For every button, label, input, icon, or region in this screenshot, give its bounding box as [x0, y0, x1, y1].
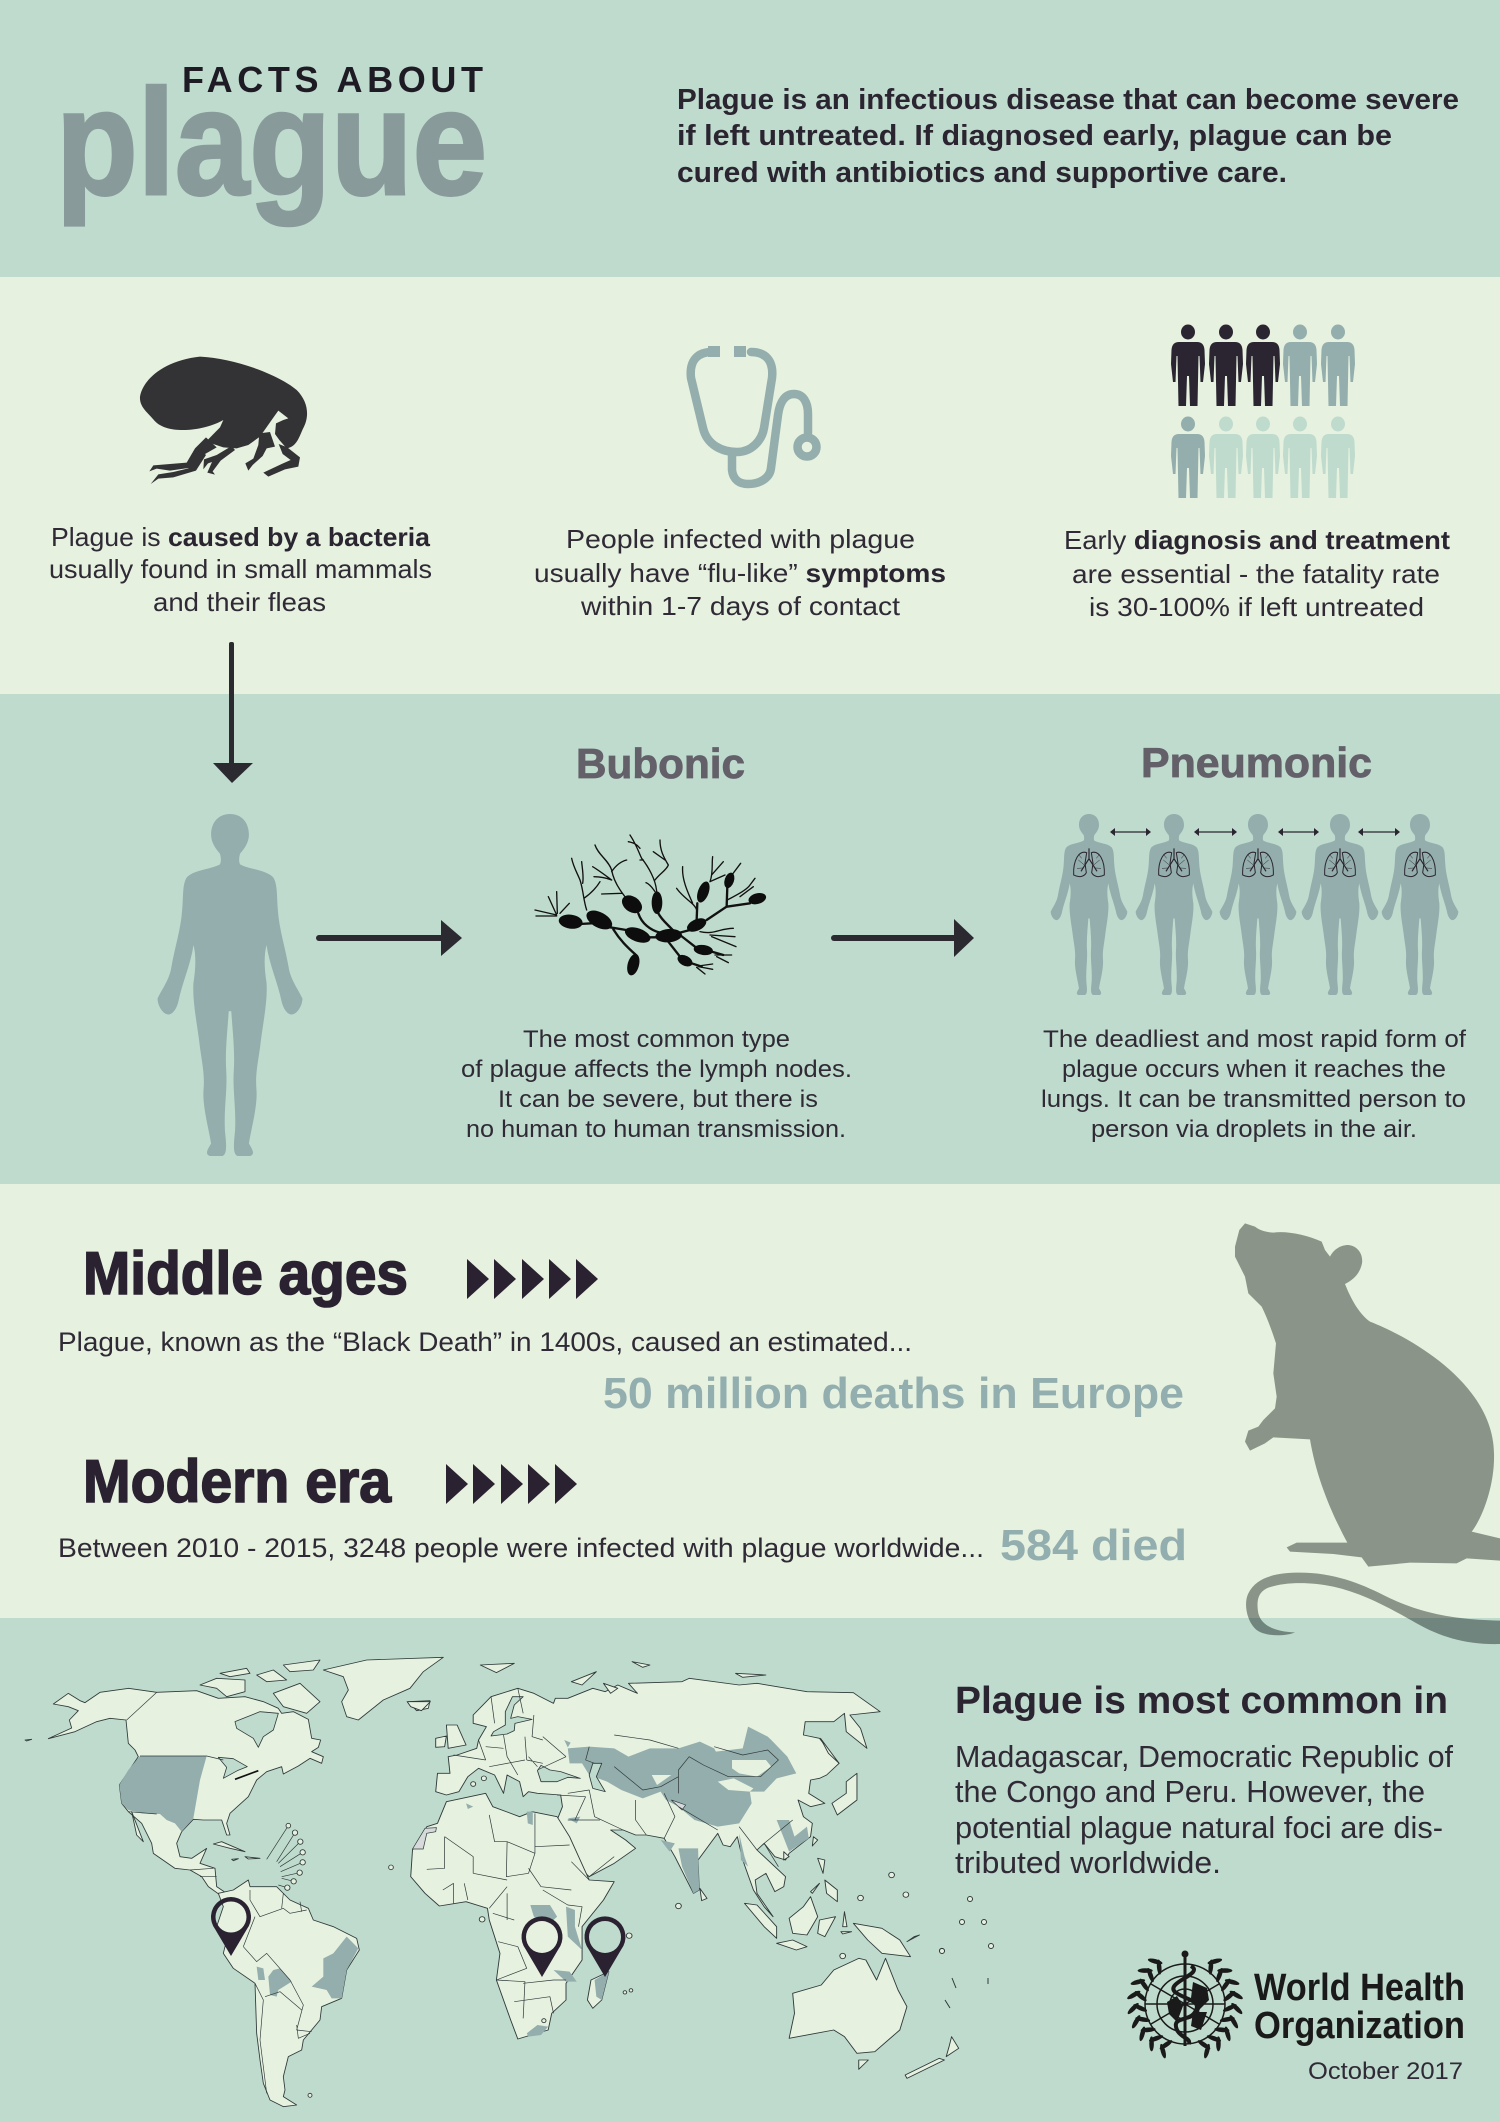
icon: map pin democratic republic of the congo: [522, 1916, 562, 1977]
text: where plague occurs: the Congo and Peru. However, the: [955, 1774, 1425, 1809]
title: FACTS ABOUT: [182, 59, 483, 100]
text: bubonic description: [461, 1026, 852, 1143]
text: caused by a bacteria: usually found in small mammals: [49, 554, 432, 584]
icon: chevrons middle ages: [467, 1259, 598, 1299]
icon: map pin peru: [211, 1897, 251, 1956]
text: diagnosis and treatment: Early diagnosis and treatment: [1064, 525, 1450, 555]
text: diagnosis and treatment: are essential - the fatality rate: [1072, 559, 1440, 589]
text: pneumonic description: [1041, 1026, 1466, 1143]
title: plague: [56, 58, 487, 226]
text: where plague occurs: tributed worldwide.: [955, 1845, 1221, 1880]
text: flu-like symptoms: [534, 524, 946, 621]
text: pneumonic description: The deadliest and most rapid form of: [1043, 1026, 1466, 1053]
icon: stethoscope: [691, 346, 816, 484]
logo: world health organization emblem: [1126, 1950, 1244, 2059]
logo text: world health organization: Organization: [1254, 2005, 1465, 2047]
text: bubonic description: It can be severe, but there is: [498, 1086, 818, 1113]
panel: history band: [0, 1184, 1500, 1618]
icon: rat silhouette: [1235, 1223, 1500, 1644]
text: black death: Plague, known as the “Black Death” in 1400s, caused an estimated...: [58, 1327, 912, 1357]
text: diagnosis and treatment: [1064, 525, 1450, 622]
text: pneumonic description: lungs. It can be transmitted person to: [1041, 1086, 1466, 1113]
map: americas: [25, 1657, 484, 2107]
heading: middle ages: Middle ages: [83, 1240, 408, 1307]
arrow: bacteria to human: [213, 642, 253, 783]
heading: bubonic: Bubonic: [576, 740, 745, 787]
text: diagnosis and treatment: is 30-100% if left untreated: [1089, 592, 1424, 622]
map: europe asia africa oceania: [407, 1662, 959, 2078]
icon: person-to-person transmission figures: [1051, 814, 1458, 995]
intro text: [677, 84, 1459, 189]
intro text: cured with antibiotics and supportive care.: [677, 157, 1287, 189]
world map: [25, 1657, 993, 2107]
text: where plague occurs: [955, 1739, 1453, 1880]
text: pneumonic description: plague occurs when it reaches the: [1062, 1056, 1446, 1083]
logo text: world health organization: [1254, 1967, 1465, 2047]
text: flu-like symptoms: People infected with plague: [566, 524, 915, 554]
icon: people showing fatality rate: [1171, 324, 1355, 498]
intro text: Plague is an infectious disease that can become severe: [677, 84, 1459, 116]
icon: lymph nodes: [535, 835, 767, 977]
text: where plague occurs: Madagascar, Democratic Republic of: [955, 1739, 1453, 1774]
panel: key facts band: [0, 277, 1500, 694]
text: caused by a bacteria: Plague is caused by a bacteria: [51, 522, 431, 552]
text: where plague occurs: potential plague natural foci are dis-: [955, 1810, 1443, 1845]
heading: plague is most common in: Plague is most common in: [955, 1680, 1448, 1722]
date: October 2017: [1308, 2058, 1463, 2085]
text: bubonic description: The most common type: [523, 1026, 790, 1053]
text: caused by a bacteria: and their fleas: [153, 587, 326, 617]
stat: 50 million deaths: 50 million deaths in Europe: [603, 1369, 1184, 1418]
icon: human body: [158, 814, 302, 1156]
text: caused by a bacteria: [49, 522, 432, 617]
text: pneumonic description: person via droplets in the air.: [1091, 1116, 1417, 1143]
map: pacific islands: [940, 1896, 994, 2008]
text: modern era cases: Between 2010 - 2015, 3248 people were infected with plague worldwide...: [58, 1533, 984, 1563]
text: bubonic description: no human to human transmission.: [466, 1116, 846, 1143]
logo text: world health organization: World Health: [1254, 1967, 1465, 2009]
icon: chevrons modern era: [446, 1464, 577, 1504]
heading: pneumonic: Pneumonic: [1141, 739, 1372, 786]
arrow: bubonic to pneumonic: [831, 919, 974, 957]
arrow: human to bubonic: [316, 920, 462, 956]
icon: map pin madagascar: [584, 1916, 626, 1977]
panel: header band: [0, 0, 1500, 277]
icon: flea: [140, 357, 307, 484]
text: flu-like symptoms: within 1-7 days of contact: [580, 591, 901, 621]
panel: geography band: [0, 1618, 1500, 2122]
panel: forms of plague band: [0, 694, 1500, 1184]
intro text: if left untreated. If diagnosed early, plague can be: [677, 120, 1392, 152]
text: flu-like symptoms: usually have “flu-like” symptoms: [534, 558, 946, 588]
text: bubonic description: of plague affects the lymph nodes.: [461, 1056, 852, 1083]
heading: modern era: Modern era: [83, 1448, 392, 1515]
stat: 584 died: 584 died: [1000, 1521, 1187, 1570]
